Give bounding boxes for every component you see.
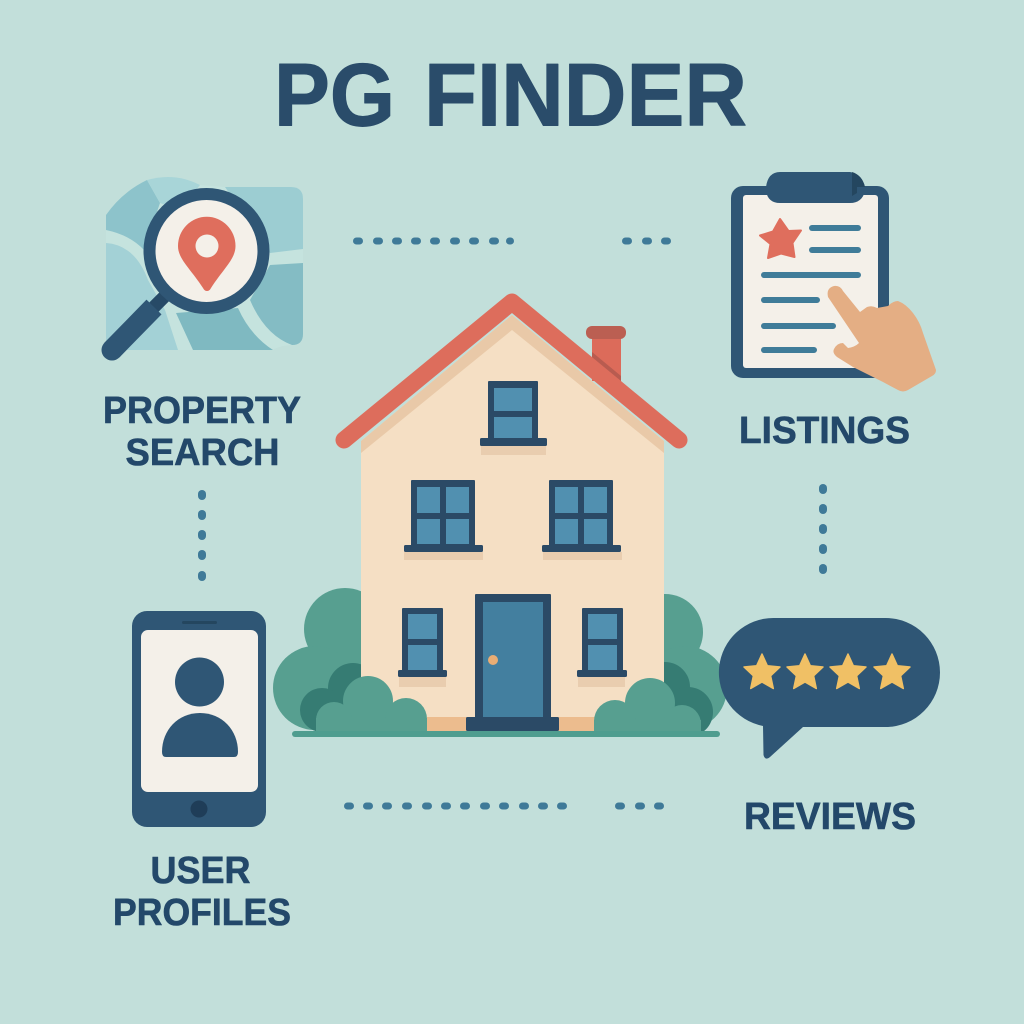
home button [190, 800, 208, 818]
window frames [398, 381, 627, 677]
roof shadow [361, 315, 664, 453]
chimney [586, 326, 626, 381]
window panes [408, 388, 617, 670]
label: listings: LISTINGS [739, 410, 910, 452]
star [760, 219, 801, 258]
label: user: USER [150, 850, 250, 892]
title: PG [274, 44, 395, 144]
label: profiles: PROFILES [113, 892, 291, 934]
icon: listings clipboard [731, 172, 936, 392]
avatar head [175, 658, 224, 706]
pointing hand [828, 286, 936, 392]
paper [743, 195, 878, 368]
icon: reviews speech bubble [719, 618, 940, 759]
text lines [764, 228, 858, 350]
phone body [132, 611, 266, 827]
map [106, 177, 303, 350]
map pin [178, 217, 236, 291]
wall [361, 315, 664, 731]
screen [141, 630, 258, 792]
title: FINDER [424, 44, 747, 144]
speaker [182, 621, 217, 624]
rating stars [744, 654, 910, 688]
ground [292, 731, 720, 737]
title [274, 44, 747, 144]
door [466, 594, 559, 731]
magnifier handle [102, 294, 167, 360]
clip [766, 172, 865, 203]
foundation [427, 717, 596, 731]
illustration: house [273, 302, 727, 743]
label: search: SEARCH [126, 432, 280, 474]
icon: property search map [102, 177, 303, 360]
magnifier lens [150, 194, 264, 308]
dotted connectors [198, 238, 827, 810]
label: property: PROPERTY [103, 390, 301, 432]
sill shadows [399, 446, 625, 687]
back bushes [273, 588, 727, 737]
front shrubs [316, 676, 701, 731]
label: reviews: REVIEWS [744, 796, 916, 838]
board [731, 186, 889, 378]
bubble [719, 618, 940, 759]
avatar body [162, 713, 238, 757]
icon: user profile phone [132, 611, 266, 827]
clip fold [852, 172, 865, 196]
roof [344, 302, 679, 440]
